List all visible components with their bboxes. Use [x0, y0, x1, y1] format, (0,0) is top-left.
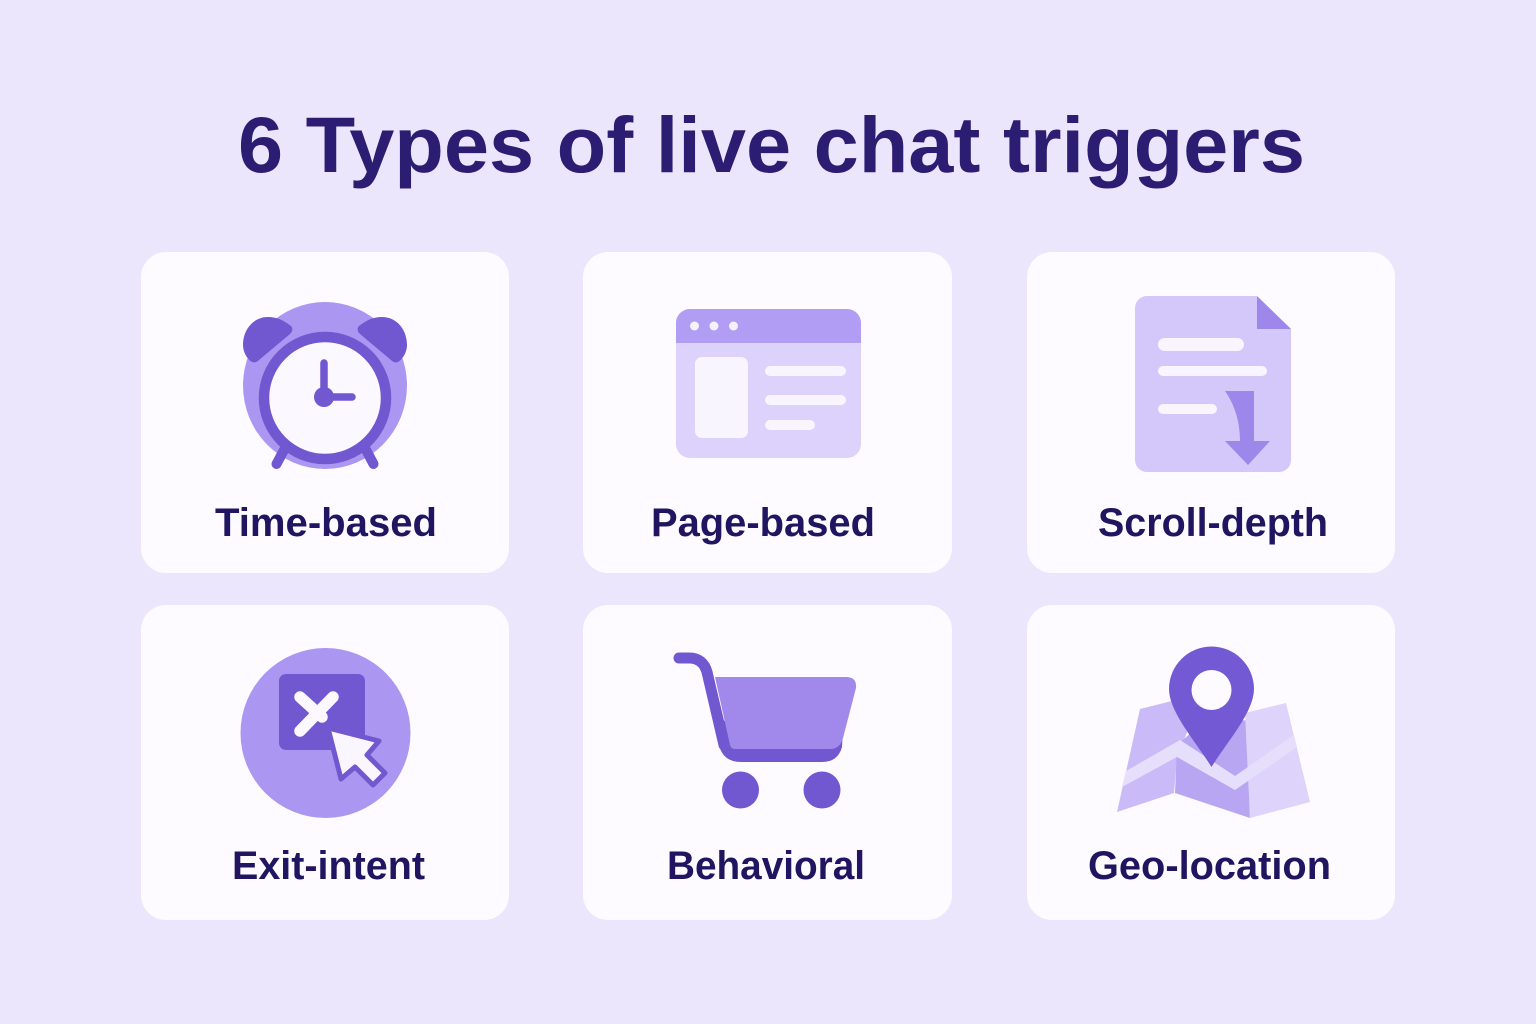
panel: time-based — [141, 252, 509, 573]
panel: exit-intent — [141, 605, 509, 920]
label: behavioral: Behavioral — [667, 844, 865, 888]
icon: browser window — [676, 309, 861, 458]
label: page-based: Page-based — [651, 501, 875, 545]
icon: alarm clock — [243, 302, 407, 469]
panel: behavioral — [583, 605, 952, 920]
label: scroll-depth: Scroll-depth — [1098, 501, 1328, 545]
label: time-based: Time-based — [215, 501, 437, 545]
icon: shopping cart — [679, 658, 856, 808]
label: exit-intent: Exit-intent — [232, 844, 425, 888]
icon: close button and cursor — [240, 648, 410, 818]
icon: map with pin — [1117, 646, 1310, 818]
panel: scroll-depth — [1027, 252, 1395, 573]
icon: document with down arrow — [1135, 296, 1291, 472]
panel: geo-location — [1027, 605, 1395, 920]
panel: page-based — [583, 252, 952, 573]
label: geo-location: Geo-location — [1088, 844, 1331, 888]
title: 6 Types of live chat triggers — [238, 100, 1305, 189]
